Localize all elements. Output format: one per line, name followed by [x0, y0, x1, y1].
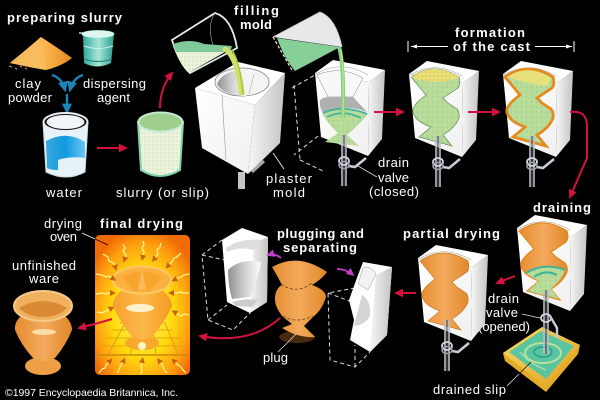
- leader: plug: [278, 334, 296, 352]
- arrow: formation to draining: [570, 112, 587, 197]
- arrow: purple right: [337, 269, 353, 275]
- text: dispersing agent: dispersing: [83, 76, 146, 91]
- leader: drying oven: [82, 233, 108, 245]
- heading: final drying: final drying: [100, 216, 183, 231]
- heading: formation of the cast: of the cast: [453, 39, 531, 54]
- heading: plugging and separating: plugging and: [277, 226, 364, 241]
- icon: clay powder pile: [9, 37, 72, 70]
- text: dispersing agent: [83, 76, 146, 105]
- text: drying oven: [44, 216, 82, 244]
- text: plaster mold: plaster: [266, 171, 313, 186]
- arrows: ingredients into water: [52, 75, 83, 112]
- heading: preparing slurry: preparing slurry: [7, 10, 123, 25]
- text: plug: plug: [263, 350, 288, 365]
- filling mold cutaway: [315, 60, 385, 186]
- heading: draining: draining: [533, 200, 591, 215]
- text: drain valve (closed): [369, 155, 419, 199]
- mold half: right: [328, 262, 392, 367]
- leader: drain valve closed: [358, 166, 377, 177]
- text: drain valve (closed): drain: [378, 155, 409, 170]
- mold: formation of cast, stage 1: [409, 61, 479, 187]
- heading: formation of the cast: [408, 25, 574, 54]
- text: drying oven: oven: [50, 229, 77, 244]
- callout leader: plaster mold: [273, 153, 284, 169]
- text: drained slip: drained slip: [433, 382, 506, 397]
- heading: plugging and separating: [277, 226, 364, 255]
- arrow: purple left: [268, 254, 281, 258]
- text: drain valve (closed): valve: [378, 170, 409, 185]
- text: water: water: [45, 185, 83, 200]
- arrow: fill to formation: [374, 111, 403, 113]
- text: clay powder: clay: [15, 76, 42, 91]
- text: clay powder: powder: [8, 90, 53, 105]
- text: drain valve (opened): (opened): [478, 319, 530, 334]
- pouring beaker 2: [273, 12, 343, 118]
- leader: drained slip: [507, 362, 531, 386]
- text: plaster mold: [266, 171, 313, 200]
- text: clay powder: [8, 76, 53, 105]
- arrow: oven to unfinished ware: [79, 319, 112, 328]
- leader: valve opened: [522, 314, 540, 318]
- arrow: slurry to filling: [160, 73, 172, 108]
- text: drain valve (closed): (closed): [369, 184, 419, 199]
- heading: filling mold: filling: [234, 3, 279, 18]
- copyright: ©1997 Encyclopaedia Britannica, Inc.: [5, 387, 178, 399]
- text: dispersing agent: agent: [97, 90, 130, 105]
- mold removed outline (dashed): [292, 75, 325, 172]
- heading: plugging and separating: separating: [283, 240, 357, 255]
- text: unfinished ware: [12, 258, 76, 286]
- unfinished ware vase: [14, 291, 72, 375]
- arrow: water to slurry: [97, 147, 126, 149]
- vase with plug: [272, 261, 327, 343]
- heading: filling mold: [234, 3, 279, 32]
- drying oven with vase: [95, 235, 190, 375]
- arrow: stage 1 to stage 2: [468, 111, 499, 113]
- text: unfinished ware: unfinished: [12, 258, 76, 273]
- mold: draining: [517, 215, 587, 354]
- plaster mold with pouring beaker: [172, 13, 285, 189]
- mold: formation of cast, stage 2: [503, 61, 573, 187]
- arrow: draining to partial drying: [497, 276, 515, 283]
- text: drain valve (opened): drain: [488, 291, 519, 306]
- heading: formation of the cast: formation: [455, 25, 525, 40]
- text: drain valve (opened): valve: [486, 305, 518, 320]
- arrow: partial drying to separating: [396, 292, 416, 294]
- mold half: left: [202, 228, 268, 330]
- icon: slurry beaker: [138, 112, 183, 176]
- text: slurry (or slip): slurry (or slip): [116, 185, 209, 200]
- tray: drained slip: [503, 327, 580, 392]
- icon: dispersing agent beaker: [79, 30, 114, 66]
- text: unfinished ware: ware: [28, 271, 59, 286]
- heading: partial drying: partial drying: [403, 226, 500, 241]
- text: plaster mold: mold: [273, 185, 305, 200]
- heading: filling mold: mold: [240, 17, 272, 32]
- arrow: separating to final drying: [200, 318, 280, 338]
- mold: partial drying: [418, 245, 488, 371]
- text: drain valve (opened): [478, 291, 530, 334]
- icon: water beaker: [43, 113, 88, 177]
- text: drying oven: drying: [44, 216, 82, 231]
